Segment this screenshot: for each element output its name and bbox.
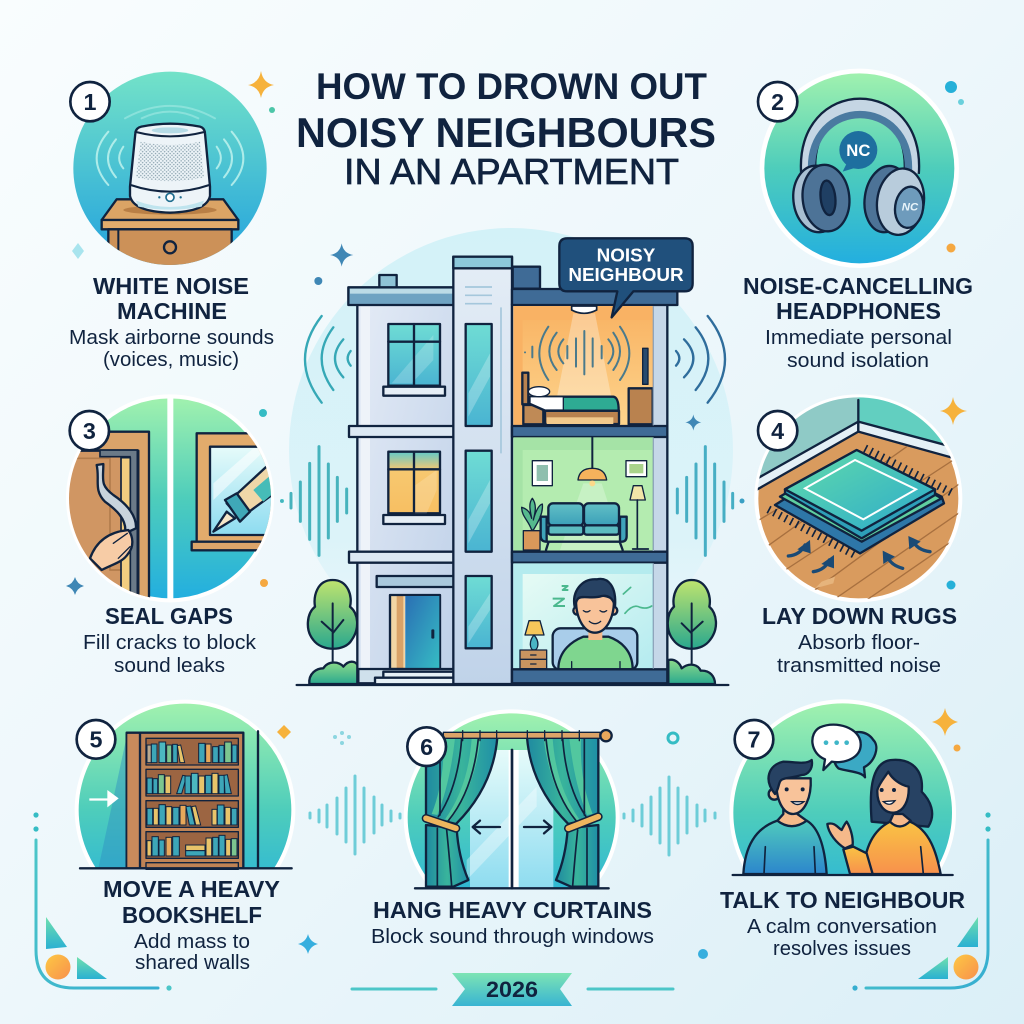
badge 4 <box>758 411 797 450</box>
description 3: sound leaks <box>114 655 225 677</box>
ground floor slab <box>512 669 667 683</box>
description 2: sound isolation <box>787 350 929 372</box>
waveform right <box>677 447 733 555</box>
heading 3: SEAL GAPS <box>105 603 233 629</box>
illustration: speaker on table <box>73 72 267 273</box>
panel 1: white noise machine <box>69 72 274 371</box>
illustration: headphones <box>762 71 957 266</box>
panel 5: heavy bookshelf <box>77 702 293 974</box>
waveform left <box>282 447 347 555</box>
tree left <box>308 580 358 684</box>
bedroom <box>513 306 653 425</box>
bedroom floor <box>512 426 667 437</box>
sparkles <box>314 243 701 431</box>
right wing <box>512 267 677 683</box>
woman <box>827 760 941 874</box>
tower <box>453 257 512 684</box>
badge 6 <box>407 727 446 766</box>
wave: between panel 6 and 7 <box>624 777 715 855</box>
description 2: Immediate personal <box>765 327 952 349</box>
heading 1: WHITE NOISE <box>93 273 249 299</box>
corner ornament bottom-right <box>852 812 991 991</box>
description 4: Absorb floor- <box>798 632 920 654</box>
panel 6: heavy curtains <box>371 711 654 948</box>
window top <box>383 324 445 396</box>
rod <box>443 730 612 741</box>
entrance canopy and door <box>358 576 462 684</box>
heading 1: MACHINE <box>117 298 227 324</box>
badge 2: 2 <box>771 89 784 115</box>
central halo circle <box>289 228 733 672</box>
description 5 <box>134 931 250 974</box>
speech bubble: NOISY <box>597 245 656 266</box>
decorative sparkles and dots <box>66 71 967 959</box>
description 2 <box>765 327 952 372</box>
heading 2 <box>743 273 973 324</box>
description 5: shared walls <box>135 952 250 974</box>
building scene <box>282 238 733 685</box>
right curtain <box>527 737 598 887</box>
title: NOISY NEIGHBOURS <box>296 109 716 156</box>
person room <box>513 563 653 670</box>
illustration: two people talking <box>729 700 956 876</box>
illustration: headphones: NC <box>902 202 919 214</box>
tv and dresser <box>643 348 648 384</box>
living floor <box>512 552 667 563</box>
description 1 <box>69 327 274 371</box>
wave: between panel 5 and 6 <box>310 776 400 854</box>
badge 7: 7 <box>748 727 760 753</box>
badge 1: 1 <box>84 89 97 115</box>
panel 7: talk to neighbour <box>720 701 965 960</box>
heading 6: HANG HEAVY CURTAINS <box>373 897 652 923</box>
heading 7: TALK TO NEIGHBOUR <box>720 887 965 913</box>
heading 5: BOOKSHELF <box>122 902 262 928</box>
heading 1 <box>93 273 249 324</box>
badge 4: 4 <box>771 418 784 444</box>
illustration: door seal and caulk <box>63 396 283 604</box>
title: HOW TO DROWN OUT <box>316 66 707 107</box>
badge 5 <box>77 720 115 759</box>
books <box>147 742 237 856</box>
left wing <box>348 287 462 684</box>
illustration: bookshelf <box>74 700 296 870</box>
badge 5: 5 <box>90 727 103 753</box>
description 6: Block sound through windows <box>371 926 654 948</box>
bed <box>522 373 619 424</box>
window middle <box>383 452 445 524</box>
badge 3 <box>70 411 109 450</box>
tree right <box>668 580 716 684</box>
illustration: headphones: NC <box>846 141 870 160</box>
heading 5 <box>103 876 280 928</box>
description 7: resolves issues <box>773 938 911 960</box>
description 1: Mask airborne sounds <box>69 327 274 349</box>
heading 2: NOISE-CANCELLING <box>743 273 973 299</box>
room sound waves <box>525 327 629 380</box>
heading 5: MOVE A HEAVY <box>103 876 280 902</box>
speech bubble <box>559 238 693 317</box>
speech bubbles <box>812 725 876 777</box>
description 3: Fill cracks to block <box>83 632 257 654</box>
left curtain <box>426 737 497 887</box>
year ribbon: 2026 <box>486 977 538 1002</box>
badge 7 <box>735 720 773 759</box>
title <box>296 66 716 192</box>
title: IN AN APARTMENT <box>344 151 679 192</box>
sound arcs left <box>305 316 351 403</box>
description 5: Add mass to <box>134 931 250 953</box>
badge 6: 6 <box>420 734 433 760</box>
panel 4: lay down rugs <box>750 393 970 677</box>
corner ornament bottom-left <box>33 812 172 991</box>
man <box>743 760 827 874</box>
sound arcs right <box>676 316 725 403</box>
description 4 <box>777 632 941 677</box>
description 4: transmitted noise <box>777 655 941 677</box>
heading 4: LAY DOWN RUGS <box>762 603 957 629</box>
year ribbon <box>352 973 673 1006</box>
speech bubble: NEIGHBOUR <box>568 264 684 285</box>
description 3 <box>83 632 257 677</box>
badge 3: 3 <box>83 418 96 444</box>
panel 2: noise-cancelling headphones <box>743 71 973 372</box>
living room <box>513 437 653 551</box>
description 7: A calm conversation <box>747 916 937 938</box>
badge 1 <box>70 82 110 121</box>
illustration: rug on floor <box>750 393 970 603</box>
description 1: (voices, music) <box>103 349 239 371</box>
chimney <box>379 275 397 288</box>
ground line <box>297 681 728 688</box>
panel 3: seal gaps <box>63 396 283 677</box>
heading 2: HEADPHONES <box>776 298 941 324</box>
illustration: curtains <box>404 710 620 890</box>
description 7 <box>747 916 937 960</box>
badge 2 <box>758 82 797 121</box>
